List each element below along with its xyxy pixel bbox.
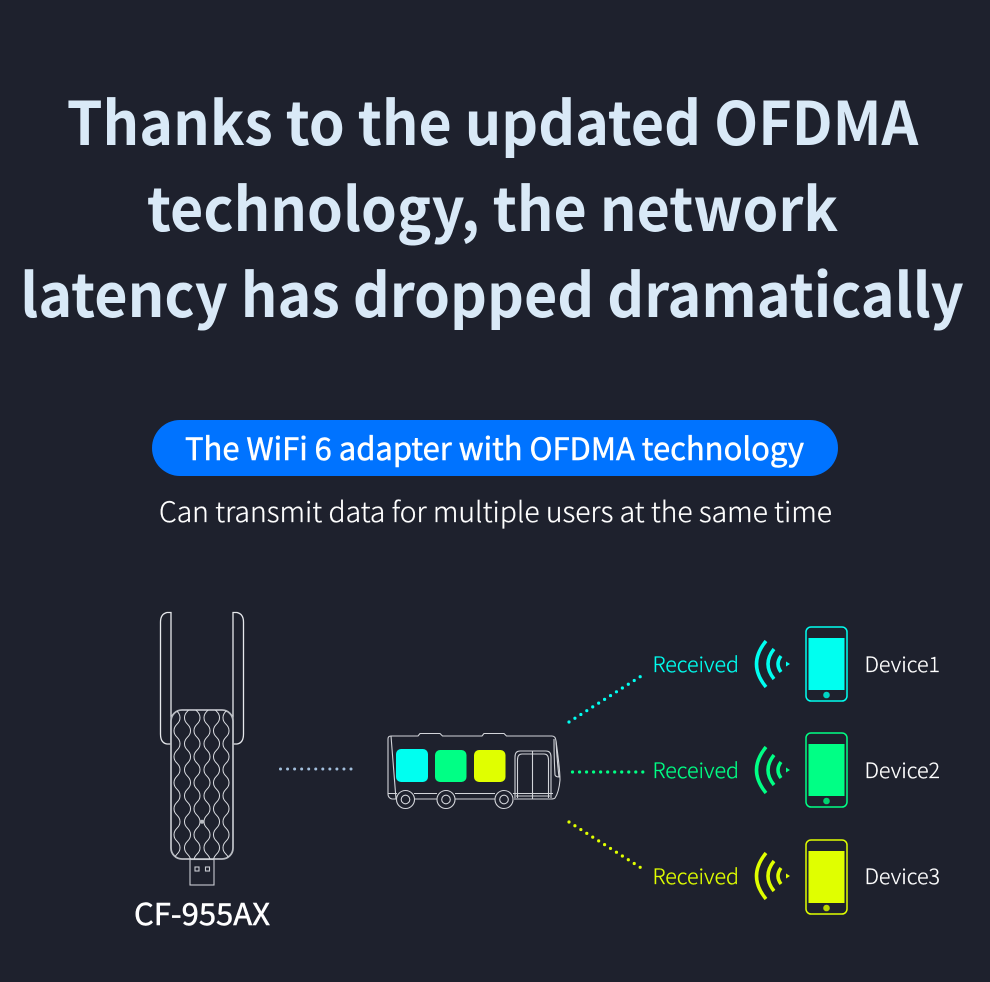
bus windows: [396, 749, 506, 782]
pill heading: The WiFi 6 adapter with OFDMA technology: [185, 424, 804, 469]
icon: signal waves 3: [756, 853, 790, 899]
icon: USB WiFi adapter: [160, 612, 244, 885]
dotted line: adapter to bus: [280, 768, 352, 770]
left antenna: [160, 612, 171, 744]
subheading: Can transmit data for multiple users at the same time: [159, 491, 832, 531]
icon: phone 1: [806, 627, 847, 701]
device label 1: Device1: [864, 649, 940, 679]
right antenna: [233, 612, 244, 744]
adapter body: [171, 710, 233, 859]
dotted line: bus to device 2: [572, 770, 645, 774]
icon: signal waves 2: [756, 747, 790, 793]
device label 3: Device3: [864, 861, 940, 891]
icon: phone 2: [806, 733, 847, 807]
device label 2: Device2: [864, 755, 940, 785]
title: latency has dropped dramatically: [20, 248, 964, 335]
title: technology, the network: [147, 162, 838, 249]
icon: phone 3: [806, 840, 847, 914]
bus wheels: [396, 790, 513, 808]
dotted line: bus to device 3: [569, 822, 646, 871]
title: [20, 76, 964, 335]
received label 3: Received: [652, 861, 739, 891]
product label: CF-955AX: [134, 890, 270, 934]
title: Thanks to the updated OFDMA: [67, 76, 919, 163]
row: device 1: [652, 627, 940, 701]
received label 1: Received: [652, 649, 739, 679]
body wave pattern: [174, 705, 229, 861]
row: device 3: [652, 840, 940, 914]
icon: bus: [388, 734, 560, 808]
bus door: [515, 751, 551, 799]
bus outline: [388, 734, 560, 799]
icon: signal waves 1: [756, 641, 790, 687]
row: device 2: [652, 733, 940, 807]
USB plug: [190, 860, 214, 885]
received label 2: Received: [652, 755, 739, 785]
dotted line: bus to device 1: [569, 673, 646, 722]
